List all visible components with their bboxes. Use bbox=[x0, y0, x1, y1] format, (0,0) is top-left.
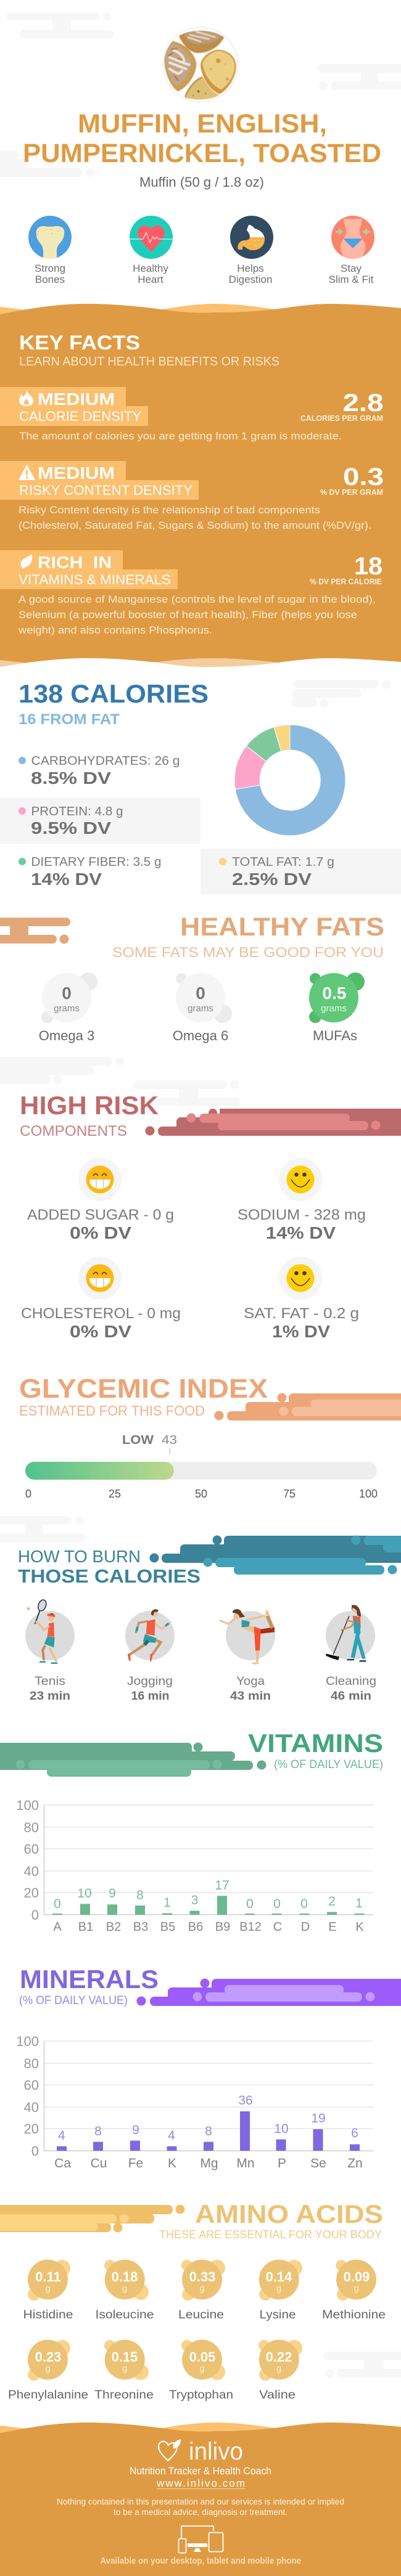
amino acid: phenylalanine bbox=[8, 2340, 88, 2402]
bar chart: vitamins: 100 bbox=[16, 1798, 39, 1813]
heading: how to burn those calories: HOW TO BURN bbox=[18, 1547, 141, 1566]
bar chart: minerals: 20 bbox=[24, 2121, 39, 2137]
amino acid: leucine: Leucine bbox=[178, 2309, 224, 2321]
risk: sodium bbox=[238, 1158, 366, 1242]
panel: key facts bbox=[0, 304, 401, 678]
amino acid: valine: Valine bbox=[259, 2389, 296, 2402]
omega 6 badge: grams bbox=[188, 1003, 213, 1014]
omega 3 badge bbox=[39, 972, 97, 1043]
bar chart: minerals: 0 bbox=[31, 2143, 39, 2159]
exercise: jogging bbox=[125, 1609, 175, 1703]
amino acid: tryptophan: Tryptophan bbox=[169, 2389, 233, 2402]
bar chart: vitamins: 3 bbox=[191, 1893, 198, 1907]
bar chart: minerals: 9 bbox=[132, 2123, 139, 2137]
amino acid: valine bbox=[258, 2340, 302, 2402]
amino acid: methionine: 0.09 bbox=[344, 2269, 370, 2285]
heading: amino acids bbox=[159, 2199, 383, 2241]
heading: minerals: MINERALS bbox=[20, 1965, 159, 1994]
icon: helps digestion bbox=[230, 216, 273, 259]
title: MUFFIN, ENGLISH, bbox=[78, 109, 327, 139]
bar chart: vitamins: B2 bbox=[106, 1920, 121, 1934]
bar chart: minerals: Se bbox=[310, 2156, 326, 2170]
fact: calorie density bbox=[0, 387, 384, 442]
risk: cholesterol bbox=[21, 1257, 181, 1341]
amino acid: threonine: 0.15 bbox=[112, 2349, 138, 2365]
amino acid: histidine: Histidine bbox=[23, 2309, 73, 2321]
glycemic index gauge: 0 bbox=[25, 1488, 31, 1500]
benefit labels: Bones bbox=[35, 274, 65, 285]
benefit labels: Slim & Fit bbox=[329, 274, 374, 285]
bar chart: vitamins: 17 bbox=[215, 1878, 229, 1893]
amino acid: leucine: g bbox=[199, 2283, 205, 2294]
omega 3 badge: grams bbox=[54, 1003, 80, 1014]
amino acid: threonine bbox=[94, 2340, 154, 2402]
mufas badge: grams bbox=[321, 1003, 347, 1014]
omega 6 badge bbox=[173, 973, 232, 1043]
bar chart: vitamins: 9 bbox=[109, 1886, 116, 1901]
bar chart: minerals bbox=[16, 2034, 373, 2170]
omega 6 badge: 0 bbox=[196, 984, 205, 1003]
exercise: yoga: Yoga bbox=[236, 1675, 265, 1688]
legend: total fat: TOTAL FAT: 1.7 g bbox=[232, 855, 334, 869]
bar chart: minerals: Mg bbox=[200, 2156, 218, 2170]
fact: risky content density bbox=[0, 461, 384, 531]
fact: rich in vitamins and minerals: VITAMINS & MINERALS bbox=[19, 572, 171, 587]
amino acid: tryptophan: g bbox=[199, 2363, 205, 2374]
amino acid: valine: 0.22 bbox=[266, 2349, 292, 2365]
amino acid: leucine bbox=[178, 2260, 225, 2321]
fact: rich in vitamins and minerals: RICH IN bbox=[38, 553, 112, 572]
bar chart: minerals: 8 bbox=[94, 2124, 102, 2138]
amino acid: histidine: g bbox=[45, 2283, 51, 2294]
heading: healthy fats: HEALTHY FATS bbox=[180, 912, 384, 941]
footer link: www.inlivo.com bbox=[156, 2477, 245, 2489]
legend: dietary fiber bbox=[19, 855, 162, 889]
fact: rich in vitamins and minerals bbox=[0, 550, 382, 636]
footer tagline: Nutrition Tracker & Health Coach bbox=[130, 2465, 271, 2477]
bar chart: vitamins: 0 bbox=[31, 1907, 39, 1923]
heading: 138 calories: 138 CALORIES bbox=[19, 679, 209, 708]
omega 3 badge: Omega 3 bbox=[39, 1028, 94, 1043]
footer availability note: Available on your desktop, tablet and mobile phone bbox=[100, 2556, 301, 2566]
heading: key facts: KEY FACTS bbox=[19, 332, 140, 354]
bar chart: minerals: 4 bbox=[168, 2129, 175, 2143]
glycemic index gauge: LOW bbox=[122, 1433, 154, 1447]
amino acid: phenylalanine: Phenylalanine bbox=[8, 2389, 88, 2402]
disclaimer: to be a medical advice, diagnosis or treatment. bbox=[114, 2507, 287, 2517]
heading: minerals bbox=[19, 1965, 159, 2007]
fact: calorie density: The amount of calories you are getting from 1 gram is moderate. bbox=[19, 430, 342, 442]
bar chart: vitamins: 1 bbox=[355, 1896, 363, 1910]
bar chart: minerals: 36 bbox=[238, 2093, 253, 2108]
benefit labels: Stay bbox=[341, 263, 362, 274]
risk: sodium: 14% DV bbox=[266, 1223, 336, 1242]
amino acid: lysine: 0.14 bbox=[266, 2269, 292, 2285]
heading: minerals: (% OF DAILY VALUE) bbox=[19, 1994, 128, 2007]
heading: vitamins: (% OF DAILY VALUE) bbox=[274, 1758, 383, 1771]
glycemic index gauge: 75 bbox=[283, 1488, 296, 1500]
amino acid: histidine: 0.11 bbox=[35, 2269, 61, 2285]
title: PUMPERNICKEL, TOASTED bbox=[23, 139, 381, 168]
legend: protein: PROTEIN: 4.8 g bbox=[31, 805, 123, 818]
risk: added sugar bbox=[27, 1158, 174, 1242]
risk: added sugar: 0% DV bbox=[70, 1223, 131, 1242]
bar chart: vitamins: 2 bbox=[328, 1894, 336, 1909]
fact: risky content density: MEDIUM bbox=[38, 463, 115, 483]
amino acid: methionine bbox=[322, 2260, 386, 2321]
bar chart: vitamins: B5 bbox=[160, 1920, 175, 1934]
heading: 138 calories: 16 FROM FAT bbox=[19, 711, 120, 728]
legend: protein bbox=[0, 798, 200, 844]
logo: inlivo: inlivo bbox=[189, 2438, 243, 2465]
amino acid: tryptophan bbox=[169, 2340, 233, 2402]
amino acid: histidine bbox=[23, 2260, 73, 2321]
glycemic index gauge: 25 bbox=[109, 1488, 121, 1500]
panel: amino acids bbox=[8, 2260, 386, 2402]
bar chart: vitamins bbox=[16, 1798, 373, 1934]
amino acid: isoleucine: g bbox=[122, 2283, 127, 2294]
amino acid: valine: g bbox=[276, 2363, 281, 2374]
bar chart: vitamins: 20 bbox=[24, 1885, 39, 1901]
bar chart: minerals: Ca bbox=[54, 2156, 71, 2170]
fact: risky content density: (Cholesterol, Saturated Fat, Sugars & Sodium) to the amount (%DV/gr). bbox=[19, 520, 371, 531]
heading: key facts bbox=[19, 332, 279, 369]
bar chart: vitamins: 10 bbox=[77, 1886, 92, 1901]
bar chart: vitamins: B9 bbox=[215, 1920, 230, 1934]
heading: key facts: LEARN ABOUT HEALTH BENEFITS OR RISKS bbox=[19, 355, 279, 369]
benefit icons row bbox=[28, 216, 374, 259]
exercise: jogging: 16 min bbox=[131, 1690, 169, 1703]
exercise: yoga: 43 min bbox=[230, 1690, 271, 1703]
amino acid: lysine: g bbox=[276, 2283, 281, 2294]
bar chart: vitamins: 8 bbox=[136, 1888, 144, 1902]
amino acid: methionine: g bbox=[353, 2283, 359, 2294]
benefit labels: Digestion bbox=[229, 274, 272, 285]
heading: glycemic index: GLYCEMIC INDEX bbox=[19, 1374, 268, 1404]
glycemic index gauge: 100 bbox=[359, 1488, 378, 1500]
heading: vitamins: VITAMINS bbox=[248, 1729, 383, 1758]
serving size: Muffin (50 g / 1.8 oz) bbox=[139, 174, 264, 190]
icon: warning triangle bbox=[19, 465, 35, 480]
risk: saturated fat: SAT. FAT - 0.2 g bbox=[244, 1305, 359, 1322]
risk: cholesterol: CHOLESTEROL - 0 mg bbox=[21, 1305, 181, 1322]
bar chart: vitamins: K bbox=[355, 1920, 364, 1934]
bar chart: minerals: 100 bbox=[16, 2034, 39, 2049]
fact: calorie density: CALORIES PER GRAM bbox=[300, 414, 383, 423]
fact: risky content density: % DV PER GRAM bbox=[320, 487, 383, 497]
heading: how to burn those calories: THOSE CALORIES bbox=[18, 1565, 200, 1587]
exercise: cleaning bbox=[326, 1605, 376, 1703]
food photo: toasted muffin halves bbox=[162, 26, 239, 103]
exercise: cleaning: 46 min bbox=[331, 1690, 371, 1703]
amino acid: phenylalanine: 0.23 bbox=[35, 2349, 61, 2365]
risk: added sugar: ADDED SUGAR - 0 g bbox=[27, 1207, 174, 1223]
bar chart: minerals: Zn bbox=[347, 2156, 363, 2170]
amino acid: lysine bbox=[259, 2260, 302, 2321]
amino acid: threonine: g bbox=[122, 2363, 127, 2374]
fact: calorie density: MEDIUM bbox=[38, 389, 115, 409]
fact: rich in vitamins and minerals: Selenium (a powerful booster of heart health), Fiber (helps you lose bbox=[19, 609, 357, 621]
bar chart: minerals: 40 bbox=[24, 2100, 39, 2115]
heading: amino acids: AMINO ACIDS bbox=[195, 2199, 383, 2228]
amino acid: phenylalanine: g bbox=[45, 2363, 51, 2374]
logo: inlivo bbox=[159, 2438, 243, 2465]
omega 3 badge: 0 bbox=[62, 984, 72, 1003]
heading: high risk components: COMPONENTS bbox=[20, 1123, 127, 1139]
bar chart: minerals: 19 bbox=[311, 2111, 326, 2126]
benefit labels: Heart bbox=[138, 274, 163, 285]
icon: healthy heart bbox=[130, 216, 173, 259]
heading: how to burn those calories bbox=[18, 1547, 200, 1587]
bar chart: minerals: Cu bbox=[91, 2156, 107, 2170]
icon: flame bbox=[19, 390, 33, 406]
fact: calorie density: 2.8 bbox=[343, 389, 384, 417]
legend: dietary fiber: DIETARY FIBER: 3.5 g bbox=[31, 855, 162, 869]
bar chart: vitamins: A bbox=[53, 1920, 62, 1934]
bar chart: minerals: K bbox=[168, 2156, 176, 2170]
bar chart: minerals: 4 bbox=[58, 2129, 65, 2143]
bar chart: vitamins: B3 bbox=[133, 1920, 148, 1934]
fact: risky content density: Risky Content density is the relationship of bad components bbox=[19, 504, 320, 516]
amino acid: methionine: Methionine bbox=[322, 2309, 386, 2321]
heading: 138 calories bbox=[19, 679, 209, 728]
bar chart: vitamins: B6 bbox=[188, 1920, 203, 1934]
amino acid: isoleucine: 0.18 bbox=[112, 2269, 138, 2285]
heading: high risk components: HIGH RISK bbox=[20, 1091, 159, 1120]
panel: calories bbox=[0, 679, 401, 894]
benefit labels: Healthy bbox=[133, 263, 168, 274]
fact: risky content density: 0.3 bbox=[343, 463, 384, 491]
amino acid: isoleucine bbox=[95, 2260, 154, 2321]
fact: calorie density: CALORIE DENSITY bbox=[19, 409, 141, 424]
bar chart: vitamins: C bbox=[273, 1920, 282, 1934]
risk: saturated fat bbox=[244, 1257, 359, 1341]
bar chart: minerals: 60 bbox=[24, 2077, 39, 2093]
mufas badge: MUFAs bbox=[313, 1028, 357, 1043]
exercise: yoga bbox=[220, 1609, 275, 1703]
legend: total fat: 2.5% DV bbox=[232, 870, 312, 889]
disclaimer: Nothing contained in this presentation and our services is intended or implied bbox=[57, 2497, 344, 2506]
legend: total fat bbox=[200, 849, 401, 894]
omega 6 badge: Omega 6 bbox=[173, 1028, 228, 1043]
heading: vitamins bbox=[248, 1729, 383, 1771]
glycemic index gauge bbox=[25, 1433, 378, 1500]
bar chart: minerals: Mn bbox=[236, 2156, 255, 2170]
exercise: tennis: Tenis bbox=[35, 1675, 65, 1688]
icon: stay slim and fit bbox=[331, 216, 374, 259]
benefit labels: Strong bbox=[35, 263, 65, 274]
bar chart: vitamins: 60 bbox=[24, 1841, 39, 1857]
glycemic index gauge: 43 bbox=[162, 1433, 177, 1447]
glycemic index gauge: 50 bbox=[195, 1488, 207, 1500]
exercise: tennis bbox=[25, 1599, 75, 1703]
bar chart: vitamins: B12 bbox=[239, 1920, 262, 1934]
legend: dietary fiber: 14% DV bbox=[31, 870, 102, 889]
bar chart: vitamins: 0 bbox=[246, 1897, 254, 1911]
title bbox=[23, 109, 381, 168]
exercise: tennis: 23 min bbox=[30, 1690, 70, 1703]
bar chart: minerals: 80 bbox=[24, 2056, 39, 2071]
heading: amino acids: THESE ARE ESSENTIAL FOR YOUR BODY bbox=[159, 2228, 382, 2241]
bar chart: vitamins: 80 bbox=[24, 1820, 39, 1835]
bar chart: vitamins: D bbox=[301, 1920, 310, 1934]
risk: saturated fat: 1% DV bbox=[272, 1322, 330, 1341]
fact: rich in vitamins and minerals: A good source of Manganese (controls the level of sugar in the blood), bbox=[19, 593, 376, 605]
legend: carbohydrates: CARBOHYDRATES: 26 g bbox=[31, 754, 180, 768]
amino acid: threonine: Threonine bbox=[94, 2389, 154, 2402]
bar chart: vitamins: 40 bbox=[24, 1864, 39, 1879]
fact: rich in vitamins and minerals: % DV PER CALORIE bbox=[310, 577, 382, 586]
heading: healthy fats: SOME FATS MAY BE GOOD FOR YOU bbox=[112, 944, 384, 960]
bar chart: minerals: Fe bbox=[128, 2156, 143, 2170]
exercise: cleaning: Cleaning bbox=[326, 1675, 376, 1688]
benefit labels: Helps bbox=[237, 263, 264, 274]
amino acid: isoleucine: Isoleucine bbox=[95, 2309, 154, 2321]
bar chart: vitamins: 0 bbox=[273, 1897, 281, 1911]
panel: exercises bbox=[25, 1599, 376, 1703]
icon: leaf bbox=[21, 554, 32, 569]
fact: rich in vitamins and minerals: 18 bbox=[354, 553, 382, 580]
risk: sodium: SODIUM - 328 mg bbox=[238, 1207, 366, 1223]
bar chart: minerals: 8 bbox=[205, 2124, 212, 2138]
bar chart: minerals: 6 bbox=[351, 2126, 358, 2140]
heading: glycemic index: ESTIMATED FOR THIS FOOD bbox=[19, 1403, 205, 1419]
fact: rich in vitamins and minerals: weight) and also contains Phosphorus. bbox=[18, 624, 212, 636]
legend: protein: 9.5% DV bbox=[31, 818, 111, 838]
fact: risky content density: RISKY CONTENT DENSITY bbox=[19, 483, 192, 498]
amino acid: tryptophan: 0.05 bbox=[189, 2349, 215, 2365]
icon: devices bbox=[179, 2526, 223, 2553]
bar chart: vitamins: 1 bbox=[163, 1896, 171, 1910]
risk: cholesterol: 0% DV bbox=[70, 1322, 131, 1341]
exercise: jogging: Jogging bbox=[127, 1675, 173, 1688]
bar chart: vitamins: E bbox=[328, 1920, 337, 1934]
legend: carbohydrates bbox=[19, 754, 180, 788]
panel: footer bbox=[0, 2423, 401, 2576]
heading: glycemic index bbox=[19, 1374, 268, 1419]
amino acid: leucine: 0.33 bbox=[189, 2269, 215, 2285]
icon: strong bones bbox=[28, 216, 72, 259]
legend: carbohydrates: 8.5% DV bbox=[31, 768, 111, 788]
mufas badge bbox=[309, 972, 365, 1043]
bar chart: vitamins: B1 bbox=[78, 1920, 93, 1934]
bar chart: minerals: 10 bbox=[274, 2122, 289, 2136]
heading: healthy fats bbox=[112, 912, 384, 960]
bar chart: vitamins: 0 bbox=[54, 1897, 61, 1911]
donut chart: macronutrients bbox=[234, 725, 345, 836]
bar chart: vitamins: 0 bbox=[300, 1897, 308, 1911]
disclaimer bbox=[57, 2497, 344, 2517]
bar chart: minerals: P bbox=[278, 2156, 286, 2170]
heading: high risk components bbox=[20, 1091, 159, 1139]
mufas badge: 0.5 bbox=[323, 984, 346, 1003]
amino acid: lysine: Lysine bbox=[259, 2309, 296, 2321]
benefit labels bbox=[35, 263, 374, 285]
